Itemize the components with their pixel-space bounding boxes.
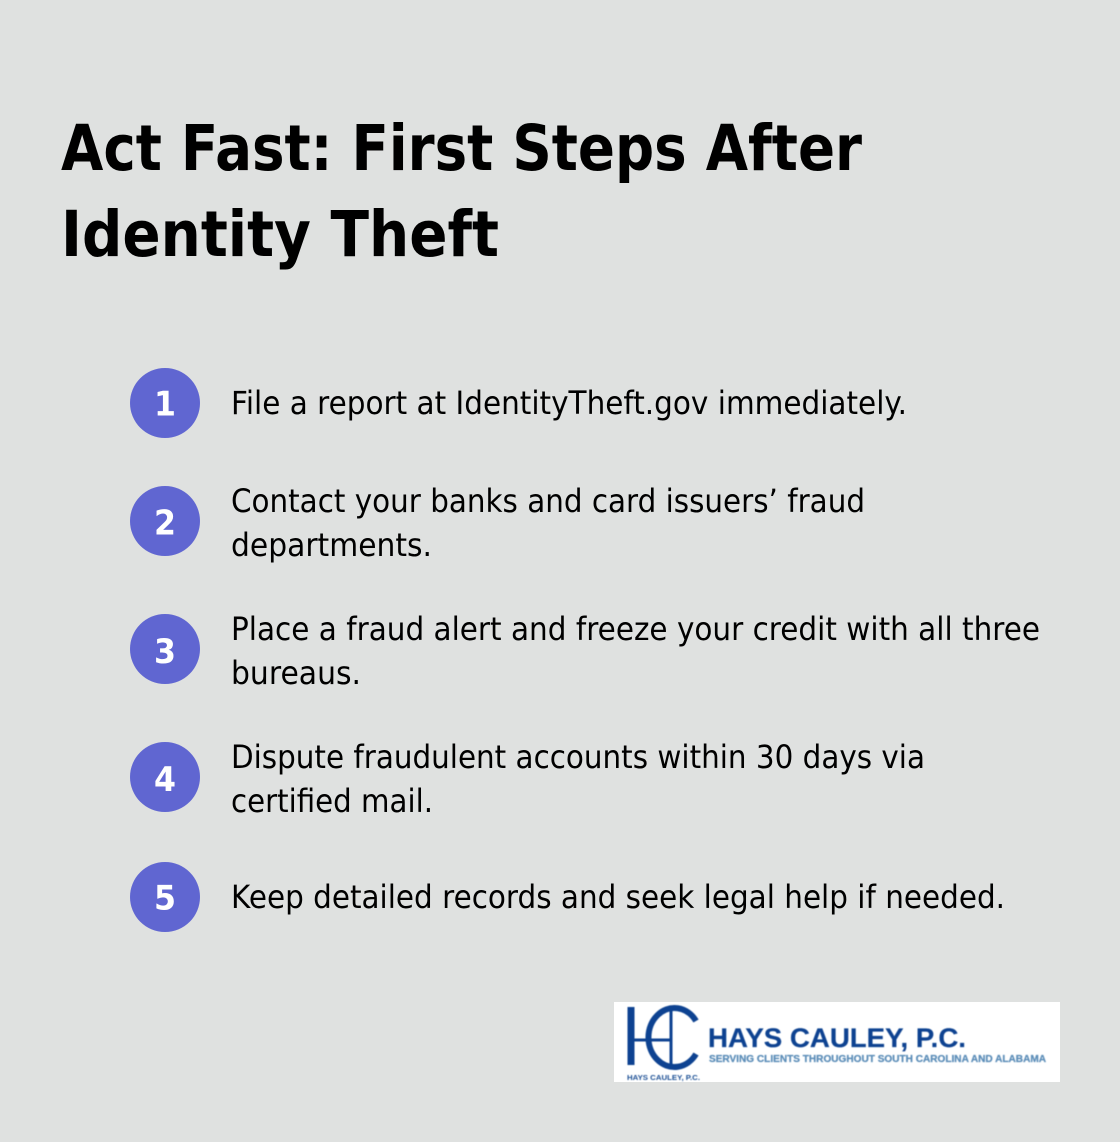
number badge 1: 1 bbox=[154, 384, 176, 424]
logo: Hays Cauley, P.C. bbox=[614, 1002, 1060, 1082]
step 5 text: Keep detailed records and seek legal help if needed. bbox=[231, 878, 1005, 916]
number badge 2: 2 bbox=[154, 504, 176, 544]
number badge 5 bbox=[130, 862, 200, 932]
step 4 text: certified mail. bbox=[231, 782, 433, 820]
number badge 3 bbox=[130, 614, 200, 684]
step 3 text bbox=[231, 610, 1040, 692]
step 2 text: Contact your banks and card issuers’ fraud bbox=[231, 482, 865, 520]
number badge 3: 3 bbox=[154, 632, 176, 672]
title: Identity Theft bbox=[61, 198, 499, 271]
number badge 1 bbox=[130, 368, 200, 438]
logo small caption: HAYS CAULEY, P.C. bbox=[627, 1075, 700, 1082]
step 2 text bbox=[231, 482, 865, 564]
logo mark: HC monogram bbox=[631, 1007, 696, 1069]
logo name: HAYS CAULEY, P.C. bbox=[708, 1023, 966, 1053]
number badge 4: 4 bbox=[154, 760, 176, 800]
step 4 bbox=[130, 738, 925, 820]
logo tagline: SERVING CLIENTS THROUGHOUT SOUTH CAROLINA AND ALABAMA bbox=[709, 1053, 1046, 1065]
step 5 bbox=[130, 862, 1005, 932]
step 2 bbox=[130, 482, 865, 564]
step 2 text: departments. bbox=[231, 526, 432, 564]
title: Act Fast: First Steps After bbox=[61, 112, 862, 185]
title bbox=[61, 112, 862, 271]
number badge 4 bbox=[130, 742, 200, 812]
number badge 5: 5 bbox=[154, 878, 176, 918]
step 3 bbox=[130, 610, 1040, 692]
step 1 bbox=[130, 368, 907, 438]
step 4 text bbox=[231, 738, 925, 820]
step 3 text: bureaus. bbox=[231, 654, 361, 692]
step 3 text: Place a fraud alert and freeze your credit with all three bbox=[231, 610, 1040, 648]
step 1 text: File a report at IdentityTheft.gov immediately. bbox=[231, 384, 907, 422]
step 4 text: Dispute fraudulent accounts within 30 days via bbox=[231, 738, 925, 776]
number badge 2 bbox=[130, 486, 200, 556]
